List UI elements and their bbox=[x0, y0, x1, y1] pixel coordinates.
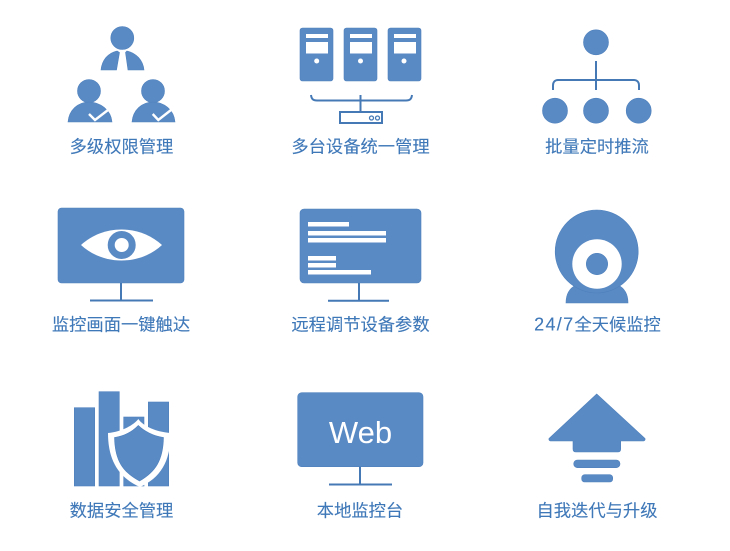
label: 数据安全管理 bbox=[70, 500, 173, 520]
panel: multi-level permissions bbox=[68, 26, 175, 156]
panel: batch scheduled streaming bbox=[542, 30, 651, 156]
icon: bars with shield bbox=[74, 392, 171, 487]
icon: web monitor: Web bbox=[329, 415, 392, 450]
label: 批量定时推流 bbox=[545, 136, 649, 156]
panel: multi-device management bbox=[291, 28, 430, 156]
icon: up arrow bbox=[549, 394, 645, 482]
panel: remote parameter adjustment bbox=[291, 209, 430, 334]
panel: data security bbox=[70, 392, 173, 520]
icon: monitor with settings lines bbox=[300, 209, 421, 301]
label: 自我迭代与升级 bbox=[537, 500, 657, 520]
icon: tree hierarchy bbox=[542, 30, 651, 123]
label: 24/7全天候监控 bbox=[534, 314, 661, 334]
label: 本地监控台 bbox=[317, 500, 403, 520]
label: 远程调节设备参数 bbox=[291, 314, 430, 334]
icon: three users bbox=[68, 26, 175, 122]
icon: webcam bbox=[555, 210, 638, 303]
panel: one-click monitoring bbox=[52, 208, 190, 334]
label: 多台设备统一管理 bbox=[291, 136, 430, 156]
panel: self iteration and upgrade bbox=[537, 394, 657, 520]
label: 监控画面一键触达 bbox=[52, 314, 190, 334]
panel: local monitoring console bbox=[298, 393, 423, 520]
icon: three servers and switch bbox=[300, 28, 421, 123]
label: 多级权限管理 bbox=[70, 136, 173, 156]
panel: 24/7 monitoring bbox=[534, 210, 661, 334]
icon: monitor with eye bbox=[58, 208, 184, 300]
